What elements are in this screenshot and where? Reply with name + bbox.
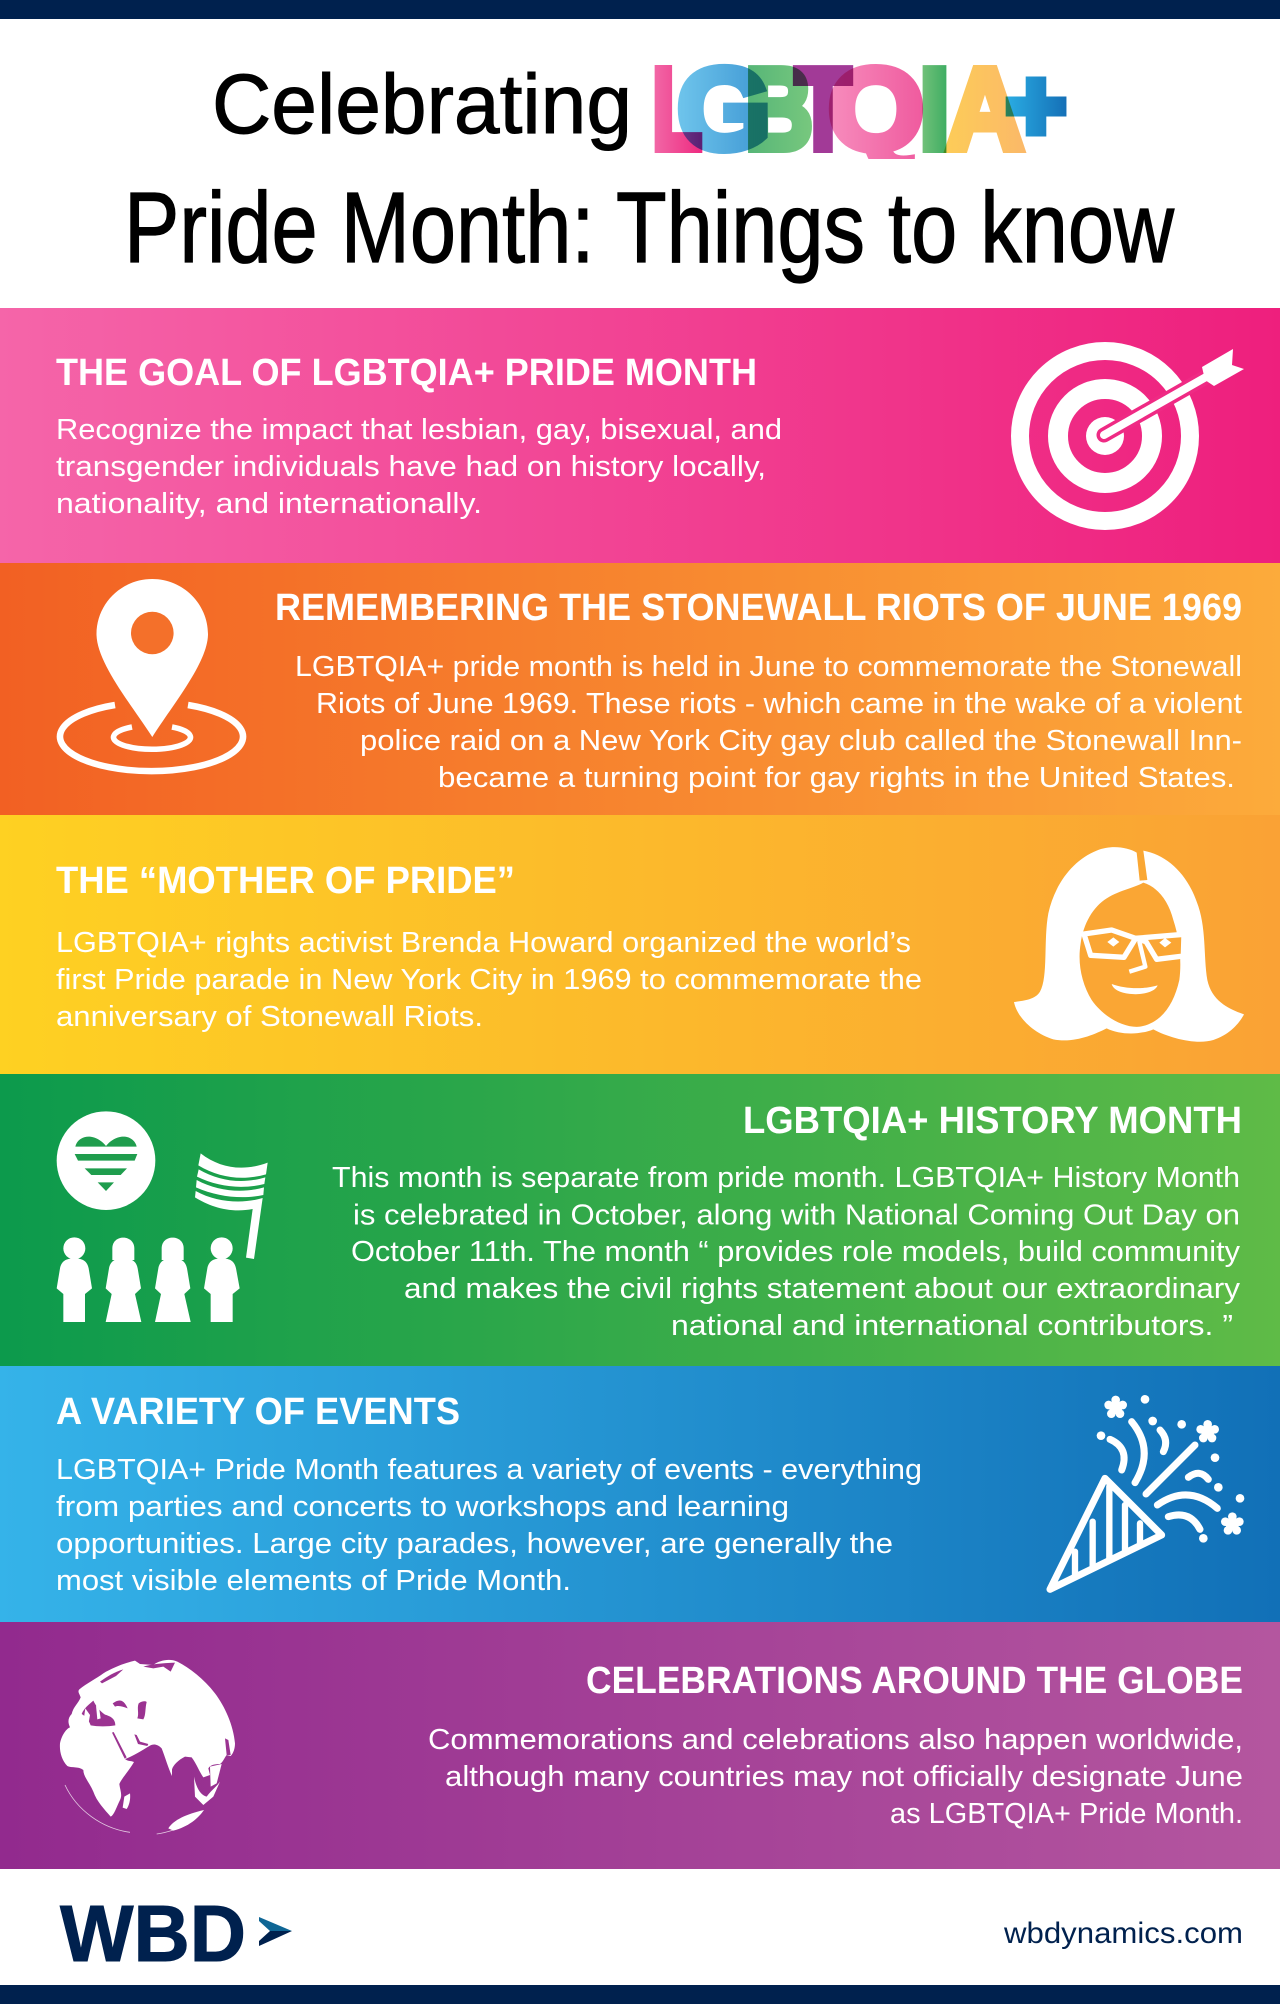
text block: goal: transgender individuals have had on history locally, <box>56 451 766 483</box>
top bar <box>0 0 1280 19</box>
text block: globe <box>428 1724 1243 1830</box>
text block: history month: national and international contributors. ” <box>671 1310 1233 1342</box>
heading: mother of pride: THE “MOTHER OF PRIDE” <box>56 860 515 902</box>
logo: LGBTQIA+ coloured letters: I <box>919 44 950 174</box>
text block: goal <box>56 414 782 520</box>
icon: people, heart and flag <box>57 1111 268 1322</box>
panel: stonewall riots <box>0 563 1280 815</box>
logo: LGBTQIA+ coloured letters: G <box>677 44 771 174</box>
logo: LGBTQIA+ coloured letters <box>654 64 1066 159</box>
text block: globe: although many countries may not officially designate June <box>445 1761 1243 1793</box>
icon: heart badge <box>57 1111 155 1210</box>
heading: goal: THE GOAL OF LGBTQIA+ PRIDE MONTH <box>56 352 757 394</box>
logo: LGBTQIA+ coloured letters: L <box>652 44 702 174</box>
heading: stonewall: REMEMBERING THE STONEWALL RIOTS OF JUNE 1969 <box>275 587 1242 629</box>
text block: history month: and makes the civil rights statement about our extraordinary <box>404 1273 1241 1305</box>
text block: mother of pride <box>56 927 922 1033</box>
text block: stonewall: became a turning point for gay rights in the United States. <box>438 762 1235 794</box>
panel: goal of pride month <box>0 308 1280 563</box>
icon: target with arrow <box>1020 349 1244 521</box>
footer <box>60 1889 1243 1978</box>
icon: person three <box>155 1238 191 1322</box>
icon: person four <box>204 1237 240 1322</box>
logo: LGBTQIA+ coloured letters: A <box>946 44 1024 174</box>
text block: globe: as LGBTQIA+ Pride Month. <box>890 1798 1243 1830</box>
logo: LGBTQIA+ coloured letters: B <box>745 44 813 174</box>
heading: events: A VARIETY OF EVENTS <box>56 1391 460 1433</box>
icon: person two <box>106 1238 141 1322</box>
logo: WBD: WBD <box>60 1889 246 1978</box>
title line one: Celebrating: Celebrating <box>212 57 632 151</box>
bottom bar <box>0 1985 1280 2004</box>
heading: globe: CELEBRATIONS AROUND THE GLOBE <box>586 1660 1243 1702</box>
text block: history month: is celebrated in October, along with National Coming Out Day on <box>353 1200 1240 1232</box>
text block: events: opportunities. Large city parades, however, are generally the <box>56 1528 893 1560</box>
title <box>124 44 1175 284</box>
panel: celebrations around the globe <box>0 1622 1280 1869</box>
panel: variety of events <box>0 1366 1280 1622</box>
icon: flag <box>195 1153 268 1259</box>
text block: mother of pride: first Pride parade in New York City in 1969 to commemorate the <box>56 964 922 996</box>
text block: goal: Recognize the impact that lesbian, gay, bisexual, and <box>56 414 782 446</box>
text block: history month <box>332 1162 1241 1342</box>
icon: woman with glasses <box>1014 847 1244 1042</box>
text block: mother of pride: LGBTQIA+ rights activist Brenda Howard organized the world’s <box>56 927 911 959</box>
text block: stonewall <box>295 651 1242 794</box>
text block: events: LGBTQIA+ Pride Month features a variety of events - everything <box>56 1454 922 1486</box>
text block: stonewall: Riots of June 1969. These riots - which came in the wake of a violent <box>316 688 1242 720</box>
icon: globe <box>60 1660 235 1834</box>
text block: history month: This month is separate from pride month. LGBTQIA+ History Month <box>332 1162 1240 1194</box>
logo: LGBTQIA+ coloured letters: Q <box>828 44 924 174</box>
text block: events: from parties and concerts to workshops and learning <box>56 1491 789 1523</box>
text block: globe: Commemorations and celebrations also happen worldwide, <box>428 1724 1243 1756</box>
icon: map pin <box>60 579 243 771</box>
text block: events <box>56 1454 922 1597</box>
text block: goal: nationality, and internationally. <box>56 488 482 520</box>
panel: history month <box>0 1074 1280 1366</box>
icon: party popper <box>1050 1395 1244 1589</box>
text block: stonewall: LGBTQIA+ pride month is held in June to commemorate the Stonewall <box>295 651 1242 683</box>
panel: mother of pride <box>0 815 1280 1074</box>
heading: history month: LGBTQIA+ HISTORY MONTH <box>743 1100 1242 1142</box>
text block: events: most visible elements of Pride Month. <box>56 1565 571 1597</box>
website url: wbdynamics.com <box>1003 1917 1243 1950</box>
text block: history month: October 11th. The month “ provides role models, build community <box>351 1236 1241 1268</box>
logo: LGBTQIA+ coloured letters: T <box>795 44 851 174</box>
icon: person one <box>57 1237 92 1322</box>
logo: LGBTQIA+ coloured letters: + <box>1006 50 1066 162</box>
text block: mother of pride: anniversary of Stonewall Riots. <box>56 1001 483 1033</box>
text block: stonewall: police raid on a New York City gay club called the Stonewall Inn- <box>360 725 1242 757</box>
